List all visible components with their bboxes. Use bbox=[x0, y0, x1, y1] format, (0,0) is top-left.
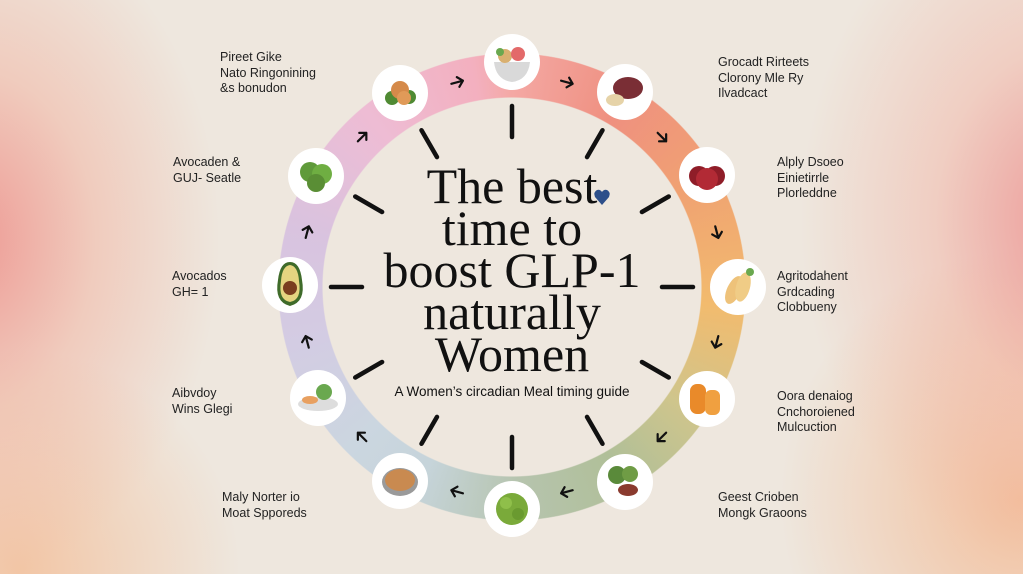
label: bottom-left: Maly Norter io bbox=[222, 490, 300, 504]
icon: avocado bbox=[262, 257, 318, 313]
tick marks bbox=[331, 106, 693, 468]
label: bottom-left bbox=[222, 490, 307, 520]
title: boost GLP-1 bbox=[384, 242, 640, 298]
label: left lower: Aibvdoy bbox=[172, 386, 216, 400]
label: left middle bbox=[172, 269, 227, 298]
arrows around ring bbox=[301, 76, 723, 498]
label: right middle bbox=[777, 269, 848, 314]
title: naturally bbox=[423, 284, 601, 340]
label: right middle: Grdcading bbox=[777, 284, 835, 298]
icon: apples bbox=[679, 147, 735, 203]
label: top-left: Nato Ringonining bbox=[220, 66, 316, 80]
label: top-left: Pireet Gike bbox=[220, 50, 282, 64]
label: right middle: Agritodahent bbox=[777, 269, 848, 283]
label: right lower bbox=[777, 389, 855, 434]
icon: salad bowl bbox=[484, 34, 540, 90]
label: right upper: Einietirrle bbox=[777, 170, 829, 184]
label: bottom-right: Geest Crioben bbox=[718, 490, 799, 504]
label: top-left bbox=[220, 50, 316, 95]
label: top-right: Grocadt Rirteets bbox=[718, 55, 809, 69]
icon: broccoli greens bbox=[484, 481, 540, 537]
subtitle: A Women’s circadian Meal timing guide bbox=[394, 384, 630, 399]
label: left lower: Wins Glegi bbox=[172, 402, 232, 416]
label: top-right: Ilvadcact bbox=[718, 86, 767, 100]
icon: greens and meat bbox=[597, 454, 653, 510]
label: bottom-left: Moat Spporeds bbox=[222, 506, 307, 520]
label: right upper bbox=[777, 155, 844, 200]
icon: bananas bbox=[710, 259, 766, 315]
icon: salad plate bbox=[290, 370, 346, 426]
ring: gradient circle bbox=[278, 53, 746, 521]
icon: heart bbox=[594, 190, 610, 205]
label: right lower: Cnchoroiened bbox=[777, 404, 855, 418]
title: time to bbox=[442, 200, 582, 256]
label: left upper bbox=[173, 155, 241, 184]
label: bottom-right: Mongk Graoons bbox=[718, 506, 807, 520]
title: The best bbox=[427, 158, 597, 214]
icon: orange squash bbox=[679, 371, 735, 427]
label: bottom-right bbox=[718, 490, 807, 520]
label: right lower: Oora denaiog bbox=[777, 389, 853, 403]
label: right upper: Plorleddne bbox=[777, 186, 837, 200]
title bbox=[384, 158, 640, 382]
label: left upper: GUJ- Seatle bbox=[173, 170, 241, 184]
icon: chicken bbox=[372, 65, 428, 121]
label: left middle: GH= 1 bbox=[172, 284, 208, 298]
label: top-right bbox=[718, 55, 809, 100]
label: right middle: Clobbueny bbox=[777, 300, 837, 314]
label: top-right: Clorony Mle Ry bbox=[718, 70, 803, 84]
label: top-left: &s bonudon bbox=[220, 81, 287, 95]
label: left upper: Avocaden & bbox=[173, 155, 240, 169]
title: Women bbox=[435, 326, 589, 382]
icon: nuts bowl bbox=[372, 453, 428, 509]
icon: lettuce bbox=[288, 148, 344, 204]
icon: meat bbox=[597, 64, 653, 120]
label: left lower bbox=[172, 386, 232, 416]
label: right upper: Alply Dsoeo bbox=[777, 155, 844, 169]
label: right lower: Mulcuction bbox=[777, 420, 837, 434]
label: left middle: Avocados bbox=[172, 269, 227, 283]
